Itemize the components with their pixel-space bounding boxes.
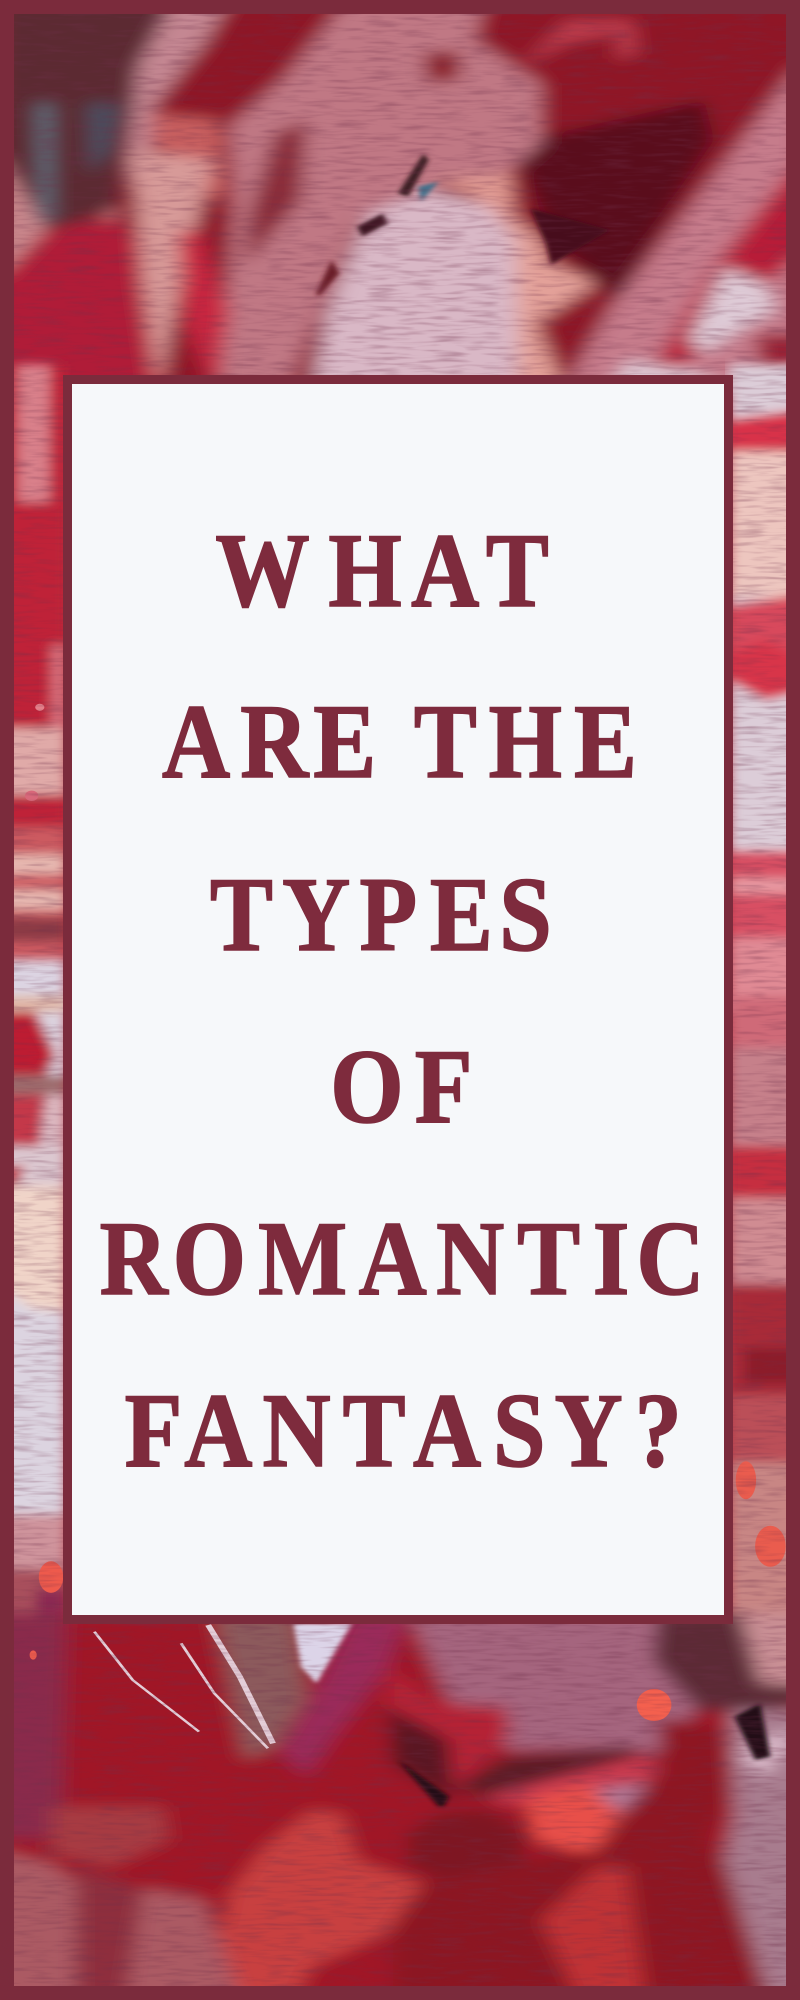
- title text: [100, 512, 704, 1489]
- title line: TYPES: TYPES: [210, 856, 552, 973]
- painting: right strip upper: [730, 364, 800, 1012]
- title line: OF: OF: [330, 1028, 472, 1145]
- painting: right strip lower: [730, 996, 800, 1628]
- painting: left strip upper: [0, 364, 66, 1012]
- title line: FANTASY?: FANTASY?: [125, 1372, 682, 1489]
- painting: bottom section: [0, 1613, 800, 2000]
- title line: ARE THE: ARE THE: [162, 683, 637, 800]
- title line: ROMANTIC: ROMANTIC: [100, 1200, 704, 1317]
- panel: title card: [68, 380, 728, 1620]
- painting: left strip lower: [0, 996, 66, 1628]
- title line: WHAT: WHAT: [215, 512, 549, 629]
- painting: top section: [0, 0, 800, 393]
